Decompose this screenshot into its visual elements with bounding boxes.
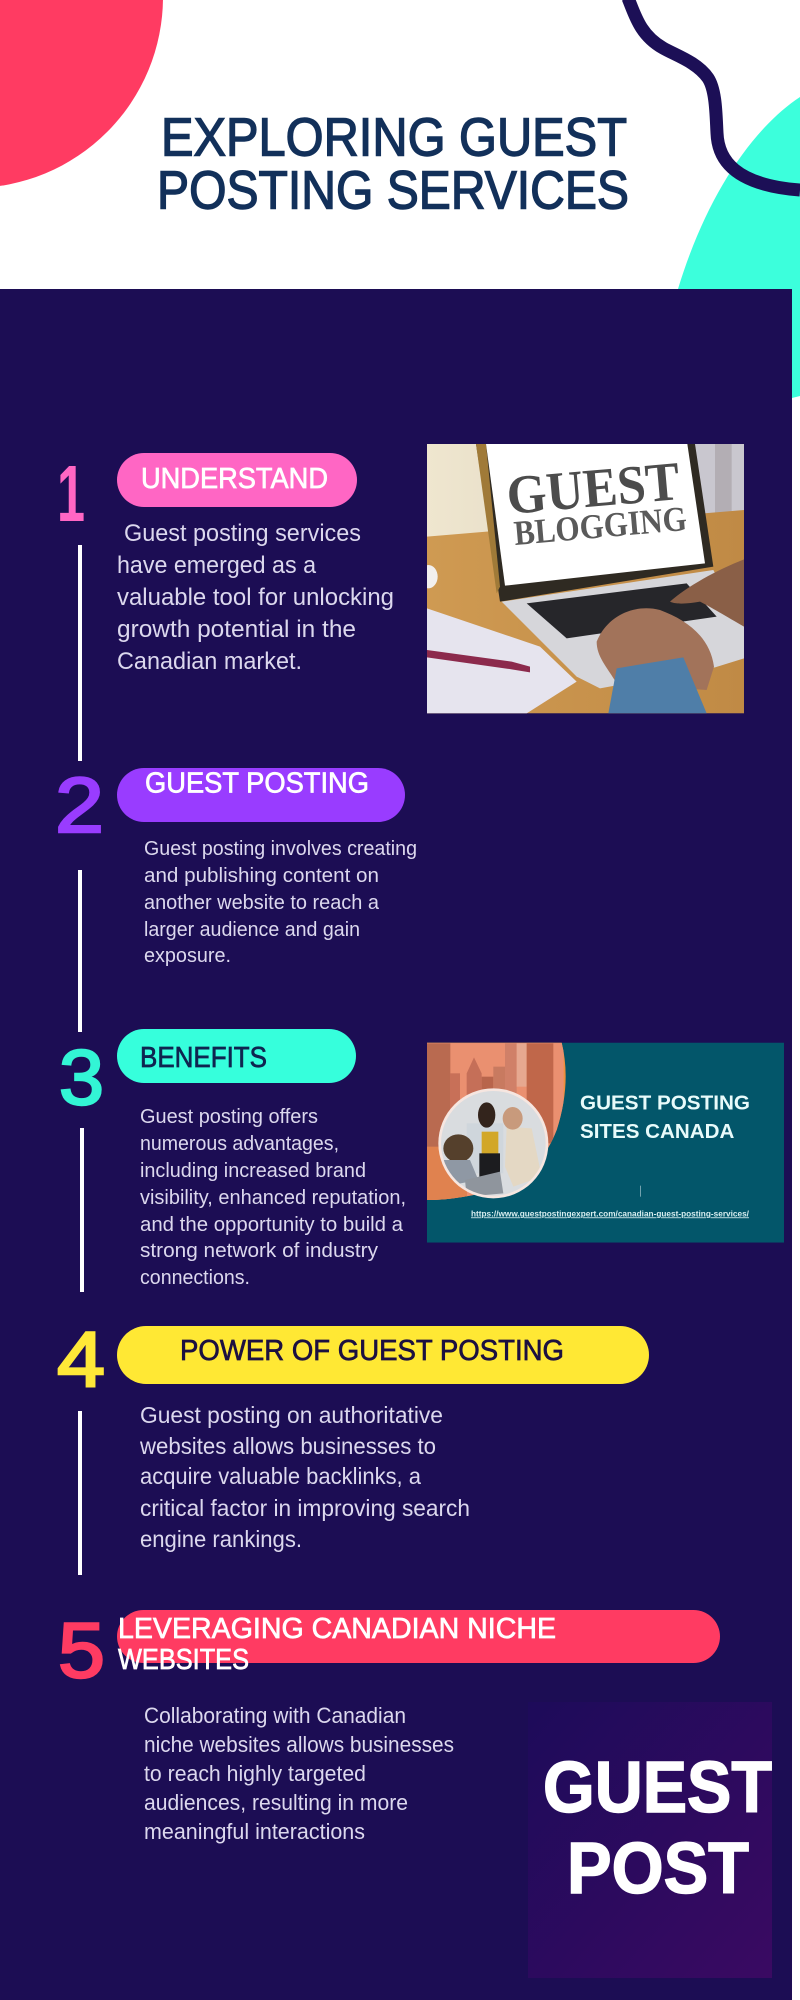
body text 4: critical factor in improving search	[140, 1495, 470, 1521]
body text 5: to reach highly targeted	[144, 1761, 366, 1786]
body text 4: acquire valuable backlinks, a	[140, 1463, 421, 1489]
body text 1: Guest posting services	[124, 520, 361, 547]
body text 5: Collaborating with Canadian	[144, 1703, 406, 1728]
body text 4: Guest posting on authoritative	[140, 1402, 443, 1428]
pill heading: power of guest posting: POWER OF GUEST POSTING	[180, 1335, 564, 1367]
section 1: understand	[57, 449, 394, 761]
title: POSTING SERVICES	[157, 160, 629, 220]
pill heading: guest posting: GUEST POSTING	[145, 768, 369, 800]
pill heading: leveraging canadian niche websites: WEBSITES	[118, 1644, 249, 1676]
body text 1	[117, 520, 394, 675]
body text 5: meaningful interactions	[144, 1819, 365, 1844]
pill heading: understand	[117, 453, 357, 507]
pill heading: leveraging canadian niche websites: LEVERAGING CANADIAN NICHE	[118, 1613, 556, 1645]
title: EXPLORING GUEST	[161, 108, 627, 168]
image: guest post graphic: GUEST	[543, 1748, 772, 1828]
number 4: 4	[57, 1315, 105, 1403]
connector line 4	[78, 1411, 82, 1575]
pill heading: benefits	[117, 1029, 356, 1083]
decorative shape: red circle top left	[0, 0, 163, 188]
pill heading: understand: UNDERSTAND	[141, 463, 328, 495]
image: guest blogging laptop photo	[419, 444, 744, 713]
body text 1: growth potential in the	[117, 616, 356, 643]
body text 1: valuable tool for unlocking	[117, 584, 394, 611]
body text 3: including increased brand	[140, 1160, 366, 1182]
body text 5: niche websites allows businesses	[144, 1732, 454, 1757]
body text 3	[140, 1106, 406, 1289]
body text 2: exposure.	[144, 945, 231, 967]
section 4: power of guest posting	[57, 1315, 649, 1575]
connector line 1	[78, 545, 82, 761]
pill heading: benefits: BENEFITS	[140, 1042, 267, 1074]
body text 4: engine rankings.	[140, 1526, 302, 1552]
body text 3: visibility, enhanced reputation,	[140, 1187, 406, 1209]
image: guest posting sites canada banner: https://www.guestpostingexpert.com/canadian-guest-posting-services/	[471, 1208, 750, 1218]
decorative shape: teal blob top right	[678, 97, 800, 398]
connector line 3	[80, 1128, 84, 1292]
body text 5: audiences, resulting in more	[144, 1790, 408, 1815]
body text 3: strong network of industry	[140, 1240, 378, 1262]
body text 3: connections.	[140, 1267, 250, 1289]
pill heading: guest posting	[117, 768, 405, 822]
body text 2	[144, 838, 417, 967]
decorative shape: navy wavy line	[628, 0, 800, 190]
image: guest post graphic: POST	[567, 1829, 749, 1909]
number 3: 3	[59, 1033, 104, 1121]
body text 3: and the opportunity to build a	[140, 1214, 404, 1236]
number 1: 1	[57, 449, 85, 538]
image: guest post graphic	[528, 1702, 772, 1978]
number 5: 5	[58, 1606, 105, 1694]
number 2: 2	[55, 761, 104, 849]
section 5: leveraging canadian niche websites	[58, 1606, 720, 1844]
body text 2: another website to reach a	[144, 892, 380, 914]
body text 2: Guest posting involves creating	[144, 838, 417, 860]
body text 4: websites allows businesses to	[139, 1433, 436, 1459]
pill heading: leveraging canadian niche websites	[117, 1610, 720, 1676]
body text 5	[144, 1703, 454, 1844]
image: guest posting sites canada banner: GUEST POSTING	[580, 1092, 750, 1114]
section 2: guest posting	[55, 761, 417, 1032]
image: guest blogging laptop photo: GUEST	[504, 450, 682, 526]
image: guest posting sites canada banner: SITES CANADA	[580, 1121, 734, 1143]
body text 1: Canadian market.	[117, 648, 302, 675]
body text 1: have emerged as a	[117, 552, 317, 579]
connector line 2	[78, 870, 82, 1032]
pill heading: power of guest posting	[117, 1326, 649, 1384]
body text 3: numerous advantages,	[140, 1133, 339, 1155]
image: guest blogging laptop photo: BLOGGING	[512, 499, 688, 553]
body text 4	[139, 1402, 470, 1552]
image: guest posting sites canada banner	[427, 1043, 784, 1243]
section 3: benefits	[59, 1029, 406, 1292]
body text 2: larger audience and gain	[144, 919, 360, 941]
title	[157, 108, 629, 220]
body text 3: Guest posting offers	[140, 1106, 318, 1128]
body text 2: and publishing content on	[144, 865, 379, 887]
